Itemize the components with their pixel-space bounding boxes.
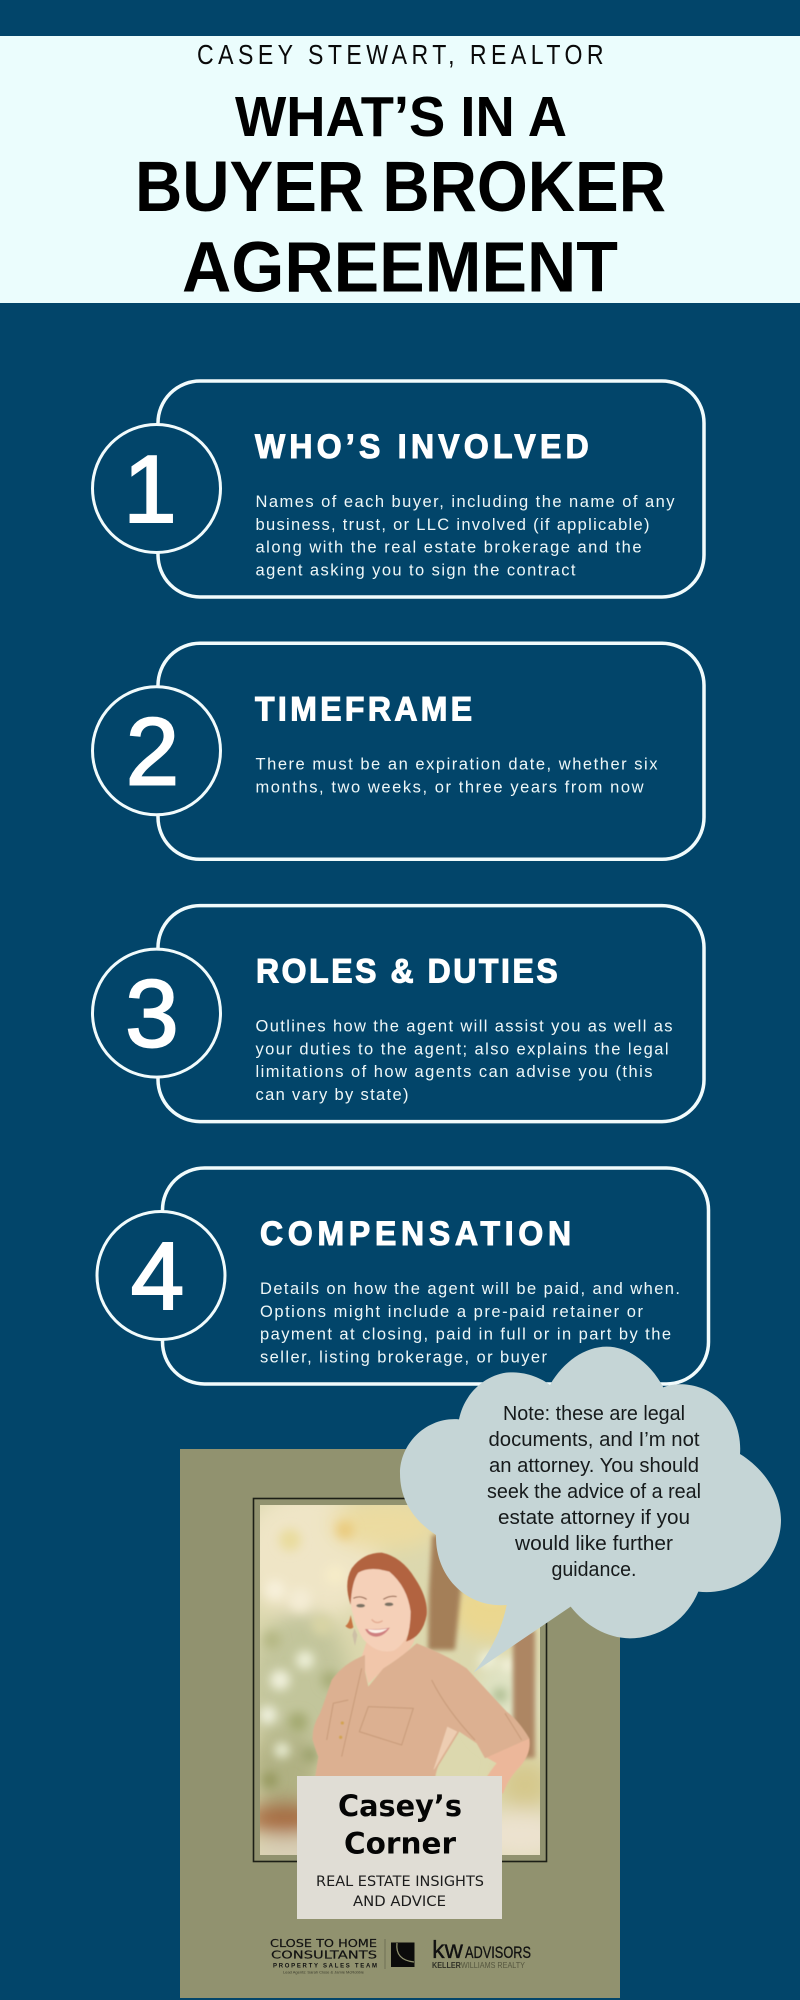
- number badge 1: 1: [123, 436, 177, 543]
- face: [350, 1567, 411, 1652]
- body 4: Options might include a pre-paid retainer or: [260, 1303, 644, 1321]
- label: casey's corner: REAL ESTATE INSIGHTS: [316, 1874, 484, 1890]
- callout: note speech cloud: [400, 1347, 781, 1673]
- author line: CASEY STEWART, REALTOR: [197, 40, 604, 70]
- icon: square emblem: [391, 1942, 414, 1967]
- logo: close to home consultants: CLOSE TO HOME: [270, 1938, 377, 1950]
- title: WHAT’S IN A: [235, 85, 567, 149]
- earring: [352, 1628, 357, 1646]
- title: BUYER BROKER: [135, 148, 666, 227]
- heading 2: TIMEFRAME: [255, 689, 472, 728]
- note text: would like further: [514, 1533, 673, 1555]
- number badge 2: [92, 687, 220, 815]
- panel: step 4 compensation: [97, 1168, 708, 1384]
- label: casey's corner: Casey’s: [338, 1789, 462, 1823]
- body 1: agent asking you to sign the contract: [256, 562, 576, 580]
- number badge 3: 3: [125, 961, 179, 1068]
- body 2: months, two weeks, or three years from now: [256, 778, 644, 796]
- logo: close to home consultants: PROPERTY SALES TEAM: [273, 1964, 377, 1970]
- shirt details: [327, 1668, 522, 1757]
- smile: [365, 1628, 390, 1637]
- note text: [487, 1403, 701, 1581]
- note text: Note: these are legal: [503, 1403, 685, 1425]
- panel: casey's corner photo card: [180, 1449, 620, 1998]
- logo: close to home consultants: Lead Agents: Sarah Close & Jamie McRobbie: [283, 1970, 364, 1974]
- body 4: [260, 1280, 680, 1366]
- body 3: limitations of how agents can advise you (this: [256, 1063, 652, 1081]
- title: [135, 85, 666, 308]
- body 3: can vary by state): [256, 1086, 408, 1104]
- header band: [0, 36, 800, 308]
- panel: step 3 roles and duties: [92, 906, 704, 1122]
- heading 3: ROLES & DUTIES: [256, 952, 558, 990]
- label: casey's corner: AND ADVICE: [353, 1894, 446, 1910]
- logo: kw advisors: ADVISORS: [465, 1943, 531, 1962]
- body 3: your duties to the agent; also explains the legal: [256, 1041, 668, 1059]
- logo: close to home consultants: [270, 1938, 414, 1974]
- neck: [362, 1637, 415, 1683]
- note text: estate attorney if you: [498, 1507, 690, 1529]
- number badge 3: [92, 949, 220, 1077]
- hair: [347, 1553, 427, 1642]
- note text: documents, and I’m not: [488, 1429, 700, 1451]
- logo: kw advisors: [432, 1936, 531, 1970]
- eyes and brows: [353, 1596, 397, 1599]
- logo: kw advisors: kw: [432, 1936, 464, 1964]
- body 4: payment at closing, paid in full or in part by the: [260, 1326, 671, 1344]
- label: casey's corner: [297, 1776, 502, 1919]
- forearm: [487, 1738, 530, 1794]
- nose: [372, 1619, 383, 1623]
- number badge 1: [92, 424, 220, 552]
- panel: step 1 who's involved: [92, 381, 704, 597]
- body 3: [256, 1018, 672, 1104]
- title: AGREEMENT: [182, 228, 618, 308]
- body 1: [256, 493, 675, 580]
- photo frame: [254, 1498, 546, 1862]
- body 2: There must be an expiration date, whether six: [256, 755, 658, 773]
- body 2: [256, 755, 658, 796]
- number badge 4: 4: [131, 1223, 184, 1330]
- heading 1: WHO’S INVOLVED: [255, 427, 589, 465]
- panel: step 2 timeframe: [92, 643, 704, 859]
- logo: close to home consultants: CONSULTANTS: [271, 1950, 377, 1962]
- body 4: Details on how the agent will be paid, and when.: [260, 1280, 680, 1298]
- body 1: business, trust, or LLC involved (if applicable): [256, 516, 650, 534]
- note text: an attorney. You should: [489, 1455, 699, 1477]
- photo of casey: [260, 1505, 540, 1855]
- body 3: Outlines how the agent will assist you as well as: [256, 1018, 672, 1036]
- body 1: Names of each buyer, including the name of any: [256, 493, 675, 511]
- number badge 2: 2: [126, 698, 179, 805]
- note text: guidance.: [552, 1559, 636, 1581]
- logo: kw advisors: KELLERWILLIAMS REALTY: [432, 1961, 526, 1970]
- body 4: seller, listing brokerage, or buyer: [260, 1348, 548, 1366]
- number badge 4: [97, 1212, 225, 1340]
- shirt: [312, 1643, 530, 1776]
- label: casey's corner: Corner: [344, 1826, 457, 1860]
- note text: seek the advice of a real: [487, 1481, 701, 1503]
- heading 4: COMPENSATION: [260, 1214, 571, 1252]
- body 1: along with the real estate brokerage and the: [256, 538, 642, 556]
